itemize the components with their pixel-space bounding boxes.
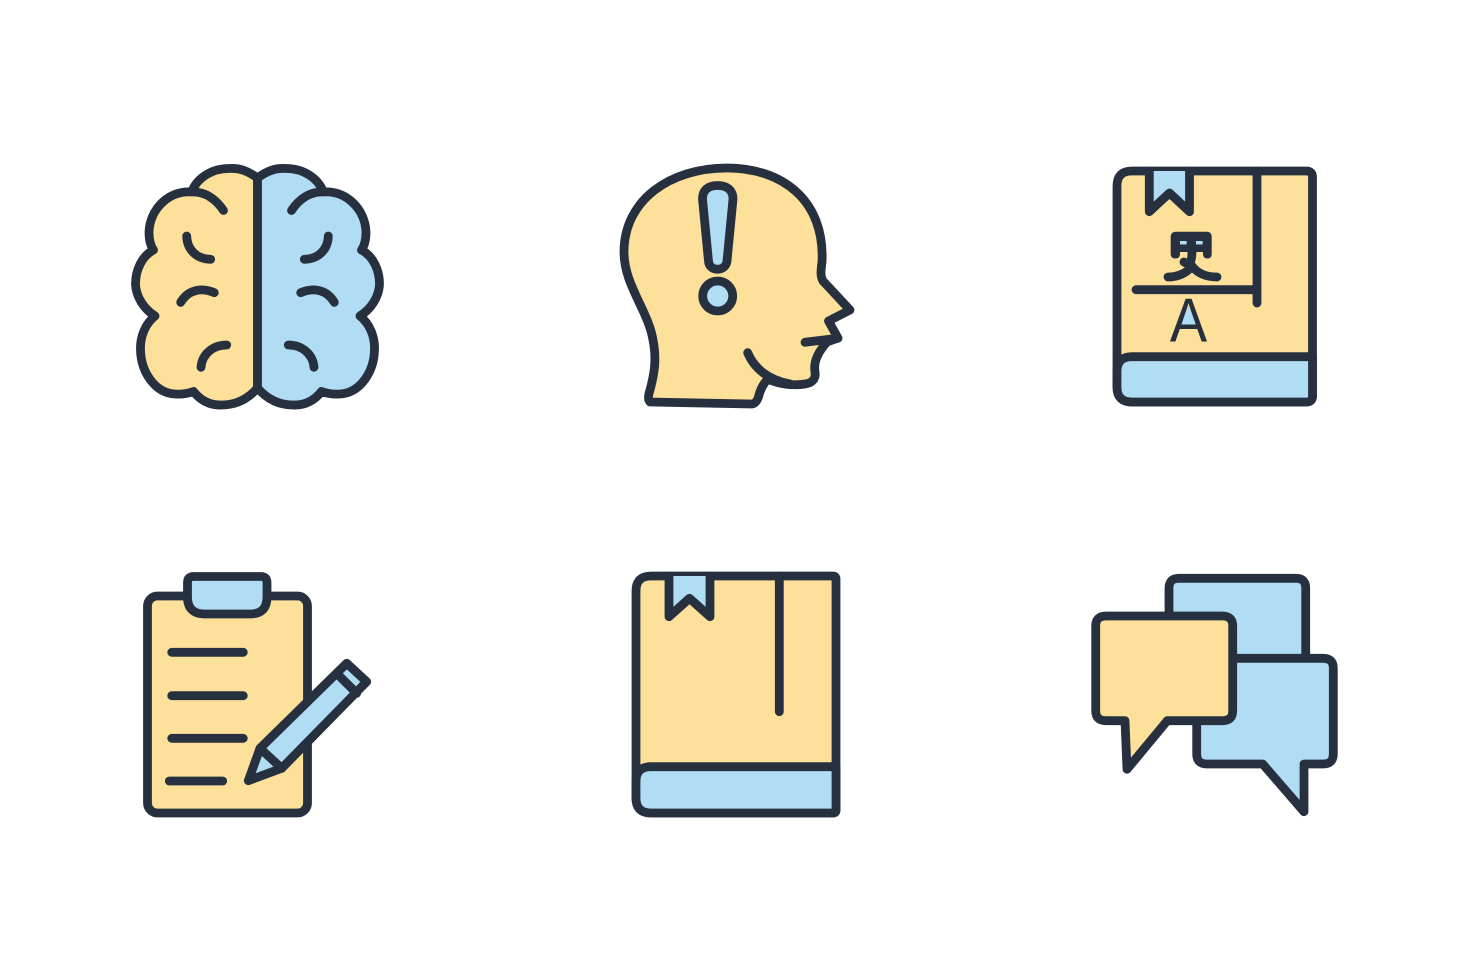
lip line [805,338,838,342]
dictionary spine band [1117,357,1312,402]
clipboard board [148,596,308,813]
pencil [248,663,367,781]
book bookmark [669,576,710,617]
dictionary cover [1117,171,1312,402]
book page line [775,576,784,712]
jaw line [748,353,790,384]
checklist lines [169,652,243,781]
head silhouette [624,168,850,404]
book cover [636,576,836,813]
exclamation dot [703,281,733,311]
clipboard clip [188,576,267,614]
front yellow bubble [1096,616,1233,769]
icon: translation dictionary [1117,171,1312,402]
foreign character glyph [1168,232,1217,277]
icon: closed book [636,576,836,813]
icon: head with exclamation mark [624,168,850,404]
icon: speech bubbles [1096,578,1333,812]
blue counter of letter A [1179,306,1198,328]
brain left hemisphere [136,168,258,405]
lower right bubble [1197,658,1333,812]
bookmark [1149,171,1190,212]
book spine band [636,767,836,813]
icon: clipboard with pencil [148,576,367,813]
brain right hemisphere [258,168,380,405]
back top bubble [1169,578,1306,668]
brain folds [181,192,334,367]
icon: brain [136,168,380,405]
exclamation bar [702,186,733,269]
letter A: A [1170,287,1208,355]
page margin lines [1136,171,1257,303]
